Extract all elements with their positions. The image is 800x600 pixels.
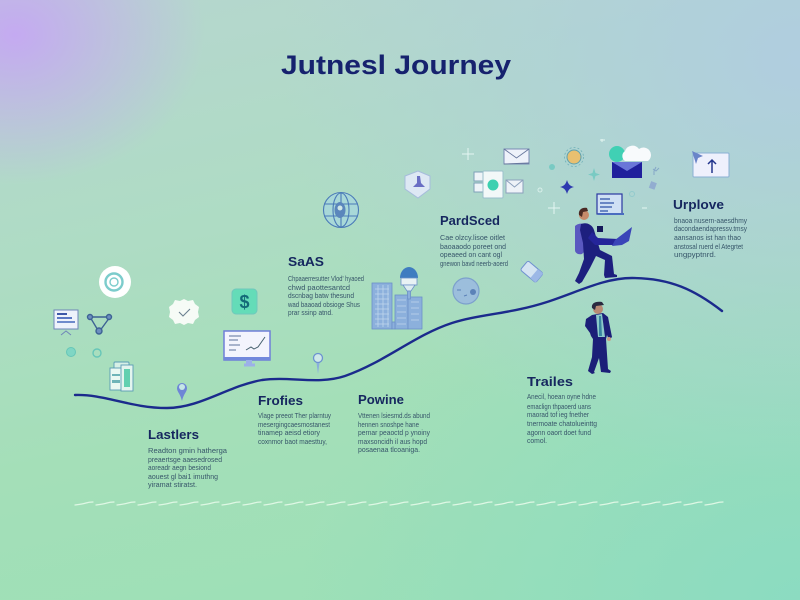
icon: network triangle [88, 314, 112, 334]
figure: standing person in suit [585, 302, 612, 374]
panel: Urplove: aansanos ist han thao [674, 233, 741, 242]
panel: Frofies: tinamep aeisd etiory [258, 428, 320, 437]
panel: Frofies: mesergingcaesmostanest [258, 420, 330, 429]
icon: cloud with chat bubble [609, 146, 651, 162]
panel: PardSced: Cae olzcy.lisoe oitlet [440, 233, 505, 242]
icon: moon sphere [453, 278, 479, 304]
panel: Urplove: dacondaendapressv.tmsy [674, 224, 747, 233]
panel: SaAS: wad baaoad obsioge Shus [287, 300, 360, 309]
icon: map pin left [177, 383, 187, 401]
panel: Frofies: Vlage preeot Ther plarntuy [258, 411, 331, 420]
icon: sparkles [462, 139, 647, 214]
panel: Lastlers: Readton gmin hatherga [148, 446, 228, 455]
panel: Lastlers: aouest gl bai1 imuthng [148, 472, 218, 481]
backpack [575, 224, 586, 254]
panel: SaAS: prar ssinp atnd. [288, 308, 333, 317]
laptop [612, 227, 632, 246]
panel: PardSced: opeaeed on cant ogl [440, 250, 502, 259]
panel: SaAS: dscnbag batw thesund [288, 291, 354, 300]
icon: phone tile [520, 261, 543, 283]
panel: SaAS: chwd paottesantcd [288, 283, 350, 292]
panel: Powine: Powine [358, 393, 404, 407]
panel: Powine: hennen snoshpe hane [358, 420, 419, 429]
icon: circular target badge [99, 266, 131, 298]
head [579, 210, 589, 220]
panel: Trailes: emaclign thpaoerd uans [527, 402, 591, 411]
panel: Frofies [258, 393, 331, 446]
icon: blue envelope [612, 162, 642, 178]
icon: globe [324, 192, 358, 228]
icon: documents [110, 362, 133, 391]
panel: Lastlers: aoreadr aegn besiond [148, 463, 211, 472]
panel: SaAS: Chpaaerresutter Vlod' hyaoed [288, 274, 364, 283]
panel: Lastlers: yiramat stiratst. [148, 480, 197, 489]
panel: PardSced: baoaaodo poreet ond [440, 242, 506, 251]
panel: PardSced [440, 214, 508, 268]
panel: Frofies: Frofies [258, 393, 303, 408]
panel: Powine: Vttenen lsiesmd.ds abund [358, 411, 430, 420]
icon: small teal gears [66, 348, 101, 357]
icon: approval badge [169, 299, 199, 325]
panel: Trailes: comol. [527, 436, 547, 445]
panel: SaAS: SaAS [288, 255, 324, 269]
panel: Trailes: Trailes [527, 375, 573, 389]
icon: map pin centre [314, 354, 322, 374]
panel: SaAS [287, 255, 364, 317]
icon: envelope top [504, 149, 529, 164]
panel: Urplove: ungpyptnrd. [674, 250, 716, 259]
journey curve [75, 278, 722, 408]
panel: Lastlers [148, 428, 228, 489]
icon: teal sparkle cluster [538, 164, 659, 196]
arm [588, 232, 620, 245]
icon: upload card with flag [692, 151, 729, 177]
icon: shield [405, 171, 430, 198]
panel: Trailes: tnermoate chatolueinttg [527, 419, 597, 428]
icon: device cluster with envelope [474, 171, 523, 198]
panel: Urplove: Urplove [673, 198, 724, 212]
icon: navy plus star [560, 180, 574, 194]
panel: Urplove: anstosal ruerd el Ategrtet [674, 242, 743, 251]
panel: Trailes: Anecil, hoean oyne hdne [527, 392, 596, 401]
icon: dollar card: $ [239, 292, 250, 312]
panel: Trailes [527, 375, 597, 445]
figure: person with laptop on curve [575, 208, 632, 284]
panel: PardSced: PardSced [440, 214, 500, 228]
panel: Powine: pernar peaoctd p ynoiny [358, 428, 430, 437]
dashed baseline [75, 502, 723, 505]
icon: city buildings and tower [372, 267, 422, 329]
panel: Powine [358, 393, 430, 454]
icon: dollar card [232, 289, 257, 314]
panel: Powine: maxsoncidh il aus hopd [358, 437, 427, 446]
panel: Trailes: agonn oaort doet fund [527, 428, 591, 437]
panel: Powine: posaenaa tlcoaniga. [358, 445, 420, 454]
panel: Urplove: bnaoa nusern-aaesdhmy [674, 216, 747, 225]
panel: Lastlers: Lastlers [148, 428, 199, 442]
icon: analytics monitor [224, 331, 270, 366]
title: Jutnesl Journey [281, 50, 511, 80]
icon: presentation board [54, 310, 78, 335]
icon: sun gear [564, 148, 584, 166]
panel: Frofies: coxnmor baot maesttuy, [258, 437, 327, 446]
panel: PardSced: gnewon bavd neerb-aoerd [440, 259, 508, 268]
icon: code laptop screen [597, 194, 624, 215]
panel: Urplove [673, 198, 747, 259]
torso and legs [575, 223, 617, 284]
panel: Lastlers: preaertsge aaesedrosed [148, 455, 222, 464]
panel: Trailes: maorad tof ieg fnether [527, 410, 589, 419]
